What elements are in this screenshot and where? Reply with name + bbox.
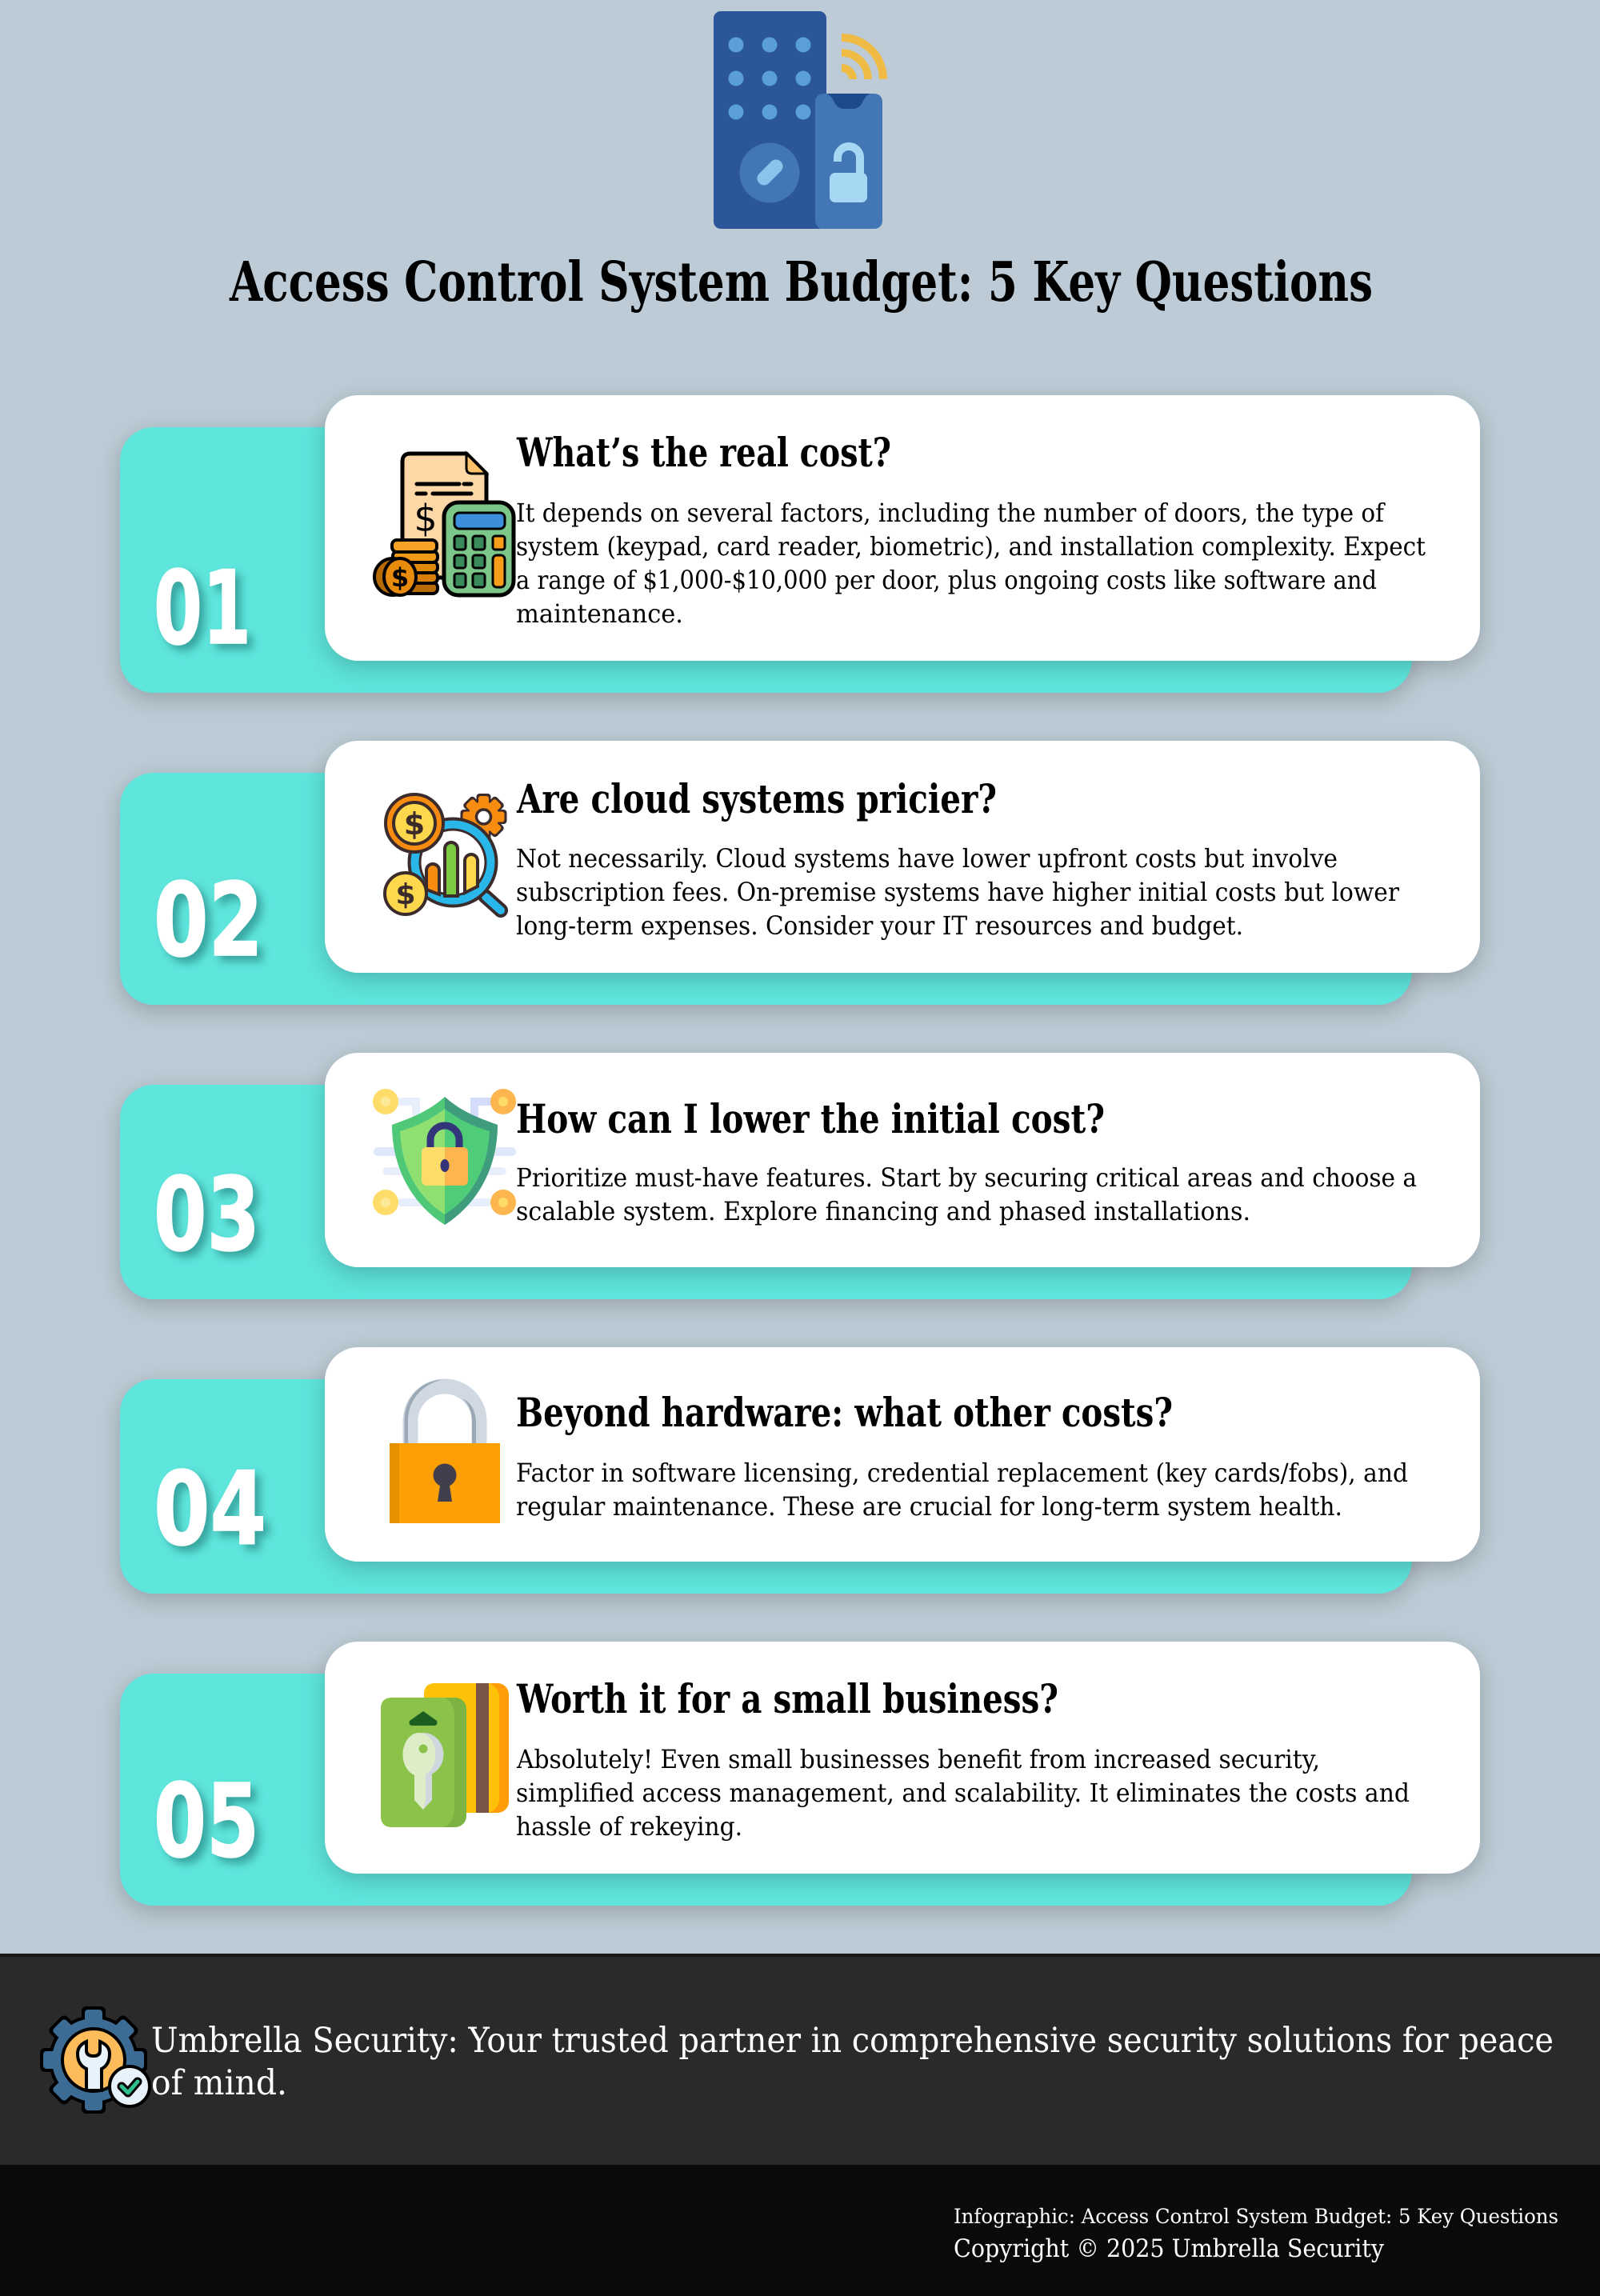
body text: Factor in software licensing, credential replacement (key cards/fobs), and xyxy=(516,1458,1408,1488)
number 02: 02 xyxy=(154,861,263,979)
icon: coins, gear and magnifier chart: $ xyxy=(395,878,416,911)
body text xyxy=(516,843,1400,941)
panel: question 2 xyxy=(120,741,1480,1005)
banner text: of mind. xyxy=(151,2063,287,2103)
body text xyxy=(516,498,1426,629)
icon: orange padlock xyxy=(390,1379,500,1523)
body text: maintenance. xyxy=(516,598,683,629)
footer text xyxy=(954,2205,1558,2263)
body text: system (keypad, card reader, biometric), and installation complexity. Expect xyxy=(516,531,1426,562)
panel: question 3 xyxy=(120,1053,1480,1299)
heading: Beyond hardware: what other costs? xyxy=(516,1389,1173,1436)
heading: Worth it for a small business? xyxy=(516,1675,1058,1722)
icon: smart door lock and phone xyxy=(714,11,883,229)
panel: question 5 xyxy=(120,1642,1480,1906)
body text xyxy=(516,1458,1408,1522)
panel: question 1 xyxy=(120,395,1480,693)
number 03: 03 xyxy=(154,1155,260,1274)
body text: Not necessarily. Cloud systems have lower upfront costs but involve xyxy=(516,843,1338,874)
body text: a range of $1,000-$10,000 per door, plus ongoing costs like software and xyxy=(516,565,1377,595)
icon: gear with wrench and check xyxy=(40,2006,150,2114)
heading: What’s the real cost? xyxy=(516,429,891,476)
icon: invoice, calculator and coins: $ xyxy=(414,497,438,540)
body text: Absolutely! Even small businesses benefit from increased security, xyxy=(516,1744,1320,1774)
banner text xyxy=(151,2021,1554,2103)
icon: coins, gear and magnifier chart: $ xyxy=(404,806,425,842)
footer text: Copyright © 2025 Umbrella Security xyxy=(954,2234,1384,2263)
body text xyxy=(516,1162,1417,1226)
number 05: 05 xyxy=(154,1762,259,1880)
body text: hassle of rekeying. xyxy=(516,1811,742,1842)
body text: It depends on several factors, including the number of doors, the type of xyxy=(516,498,1386,528)
panel: question 4 xyxy=(120,1347,1480,1594)
body text: scalable system. Explore financing and phased installations. xyxy=(516,1196,1250,1226)
body text: subscription fees. On-premise systems have higher initial costs but lower xyxy=(516,877,1400,907)
icon: invoice, calculator and coins: $ xyxy=(391,562,409,593)
panel: company banner xyxy=(0,1954,1600,2165)
panel: copyright footer xyxy=(0,2165,1600,2296)
heading: Are cloud systems pricier? xyxy=(516,775,997,822)
number 01: 01 xyxy=(154,549,251,667)
icon: key cards xyxy=(381,1683,509,1827)
footer text: Infographic: Access Control System Budget: 5 Key Questions xyxy=(954,2205,1558,2228)
icon: invoice, calculator and coins xyxy=(374,454,514,595)
body text: regular maintenance. These are crucial for long-term system health. xyxy=(516,1491,1342,1522)
number 04: 04 xyxy=(154,1450,266,1568)
body text xyxy=(516,1744,1410,1842)
icon: coins, gear and magnifier chart xyxy=(385,794,507,914)
body text: simplified access management, and scalability. It eliminates the costs and xyxy=(516,1778,1410,1808)
body text: long-term expenses. Consider your IT resources and budget. xyxy=(516,910,1243,941)
body text: Prioritize must-have features. Start by securing critical areas and choose a xyxy=(516,1162,1417,1193)
icon: security shield with padlock xyxy=(373,1089,516,1225)
heading: How can I lower the initial cost? xyxy=(516,1095,1105,1142)
